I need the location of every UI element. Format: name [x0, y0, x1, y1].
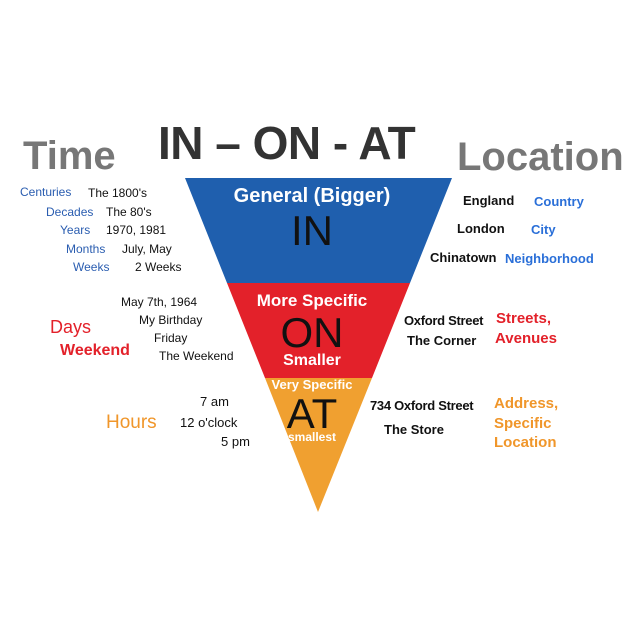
text: Location: [494, 434, 556, 451]
location IN examples: [430, 193, 594, 266]
text: Years: [60, 223, 90, 237]
text: London: [457, 221, 505, 236]
text: Weekend: [60, 342, 130, 359]
time ON examples: [50, 295, 234, 363]
text: Centuries: [20, 185, 71, 199]
text: Chinatown: [430, 250, 496, 265]
text: IN: [291, 207, 333, 254]
text: England: [463, 193, 514, 208]
text: Country: [534, 194, 584, 209]
text: Weeks: [73, 260, 109, 274]
text: City: [531, 222, 556, 237]
text: Months: [66, 242, 105, 256]
text: 2 Weeks: [135, 260, 181, 274]
text: Specific: [494, 415, 552, 432]
text: Days: [50, 317, 91, 337]
text: Streets,: [496, 310, 551, 327]
text: 12 o'clock: [180, 415, 237, 430]
text: 7 am: [200, 394, 229, 409]
text: 1970, 1981: [106, 223, 166, 237]
text: July, May: [122, 242, 172, 256]
triangle labels: [234, 185, 390, 444]
text: Address,: [494, 395, 558, 412]
text: smallest: [288, 430, 336, 444]
title: IN – ON - AT: [158, 117, 415, 169]
text: Oxford Street: [404, 313, 483, 328]
text: General (Bigger): [234, 185, 390, 207]
text: My Birthday: [139, 313, 202, 327]
text: Neighborhood: [505, 251, 594, 266]
text: The Corner: [407, 333, 476, 348]
text: The 80's: [106, 205, 152, 219]
text: Smaller: [283, 352, 341, 369]
text: Avenues: [495, 330, 557, 347]
time AT examples: [106, 394, 250, 449]
location AT examples: [370, 395, 558, 451]
text: The 1800's: [88, 186, 147, 200]
text: 5 pm: [221, 434, 250, 449]
text: More Specific: [257, 291, 367, 310]
location ON examples: [404, 310, 557, 348]
text: AT: [287, 390, 337, 437]
text: May 7th, 1964: [121, 295, 197, 309]
text: The Weekend: [159, 349, 234, 363]
heading: time: Time: [23, 134, 116, 178]
text: Hours: [106, 412, 157, 433]
text: 734 Oxford Street: [370, 398, 473, 413]
text: Very Specific: [272, 377, 352, 392]
heading: location: Location: [457, 135, 624, 179]
text: Decades: [46, 205, 93, 219]
time IN examples: [20, 185, 182, 274]
text: The Store: [384, 422, 444, 437]
text: ON: [280, 309, 344, 356]
text: Friday: [154, 331, 187, 345]
